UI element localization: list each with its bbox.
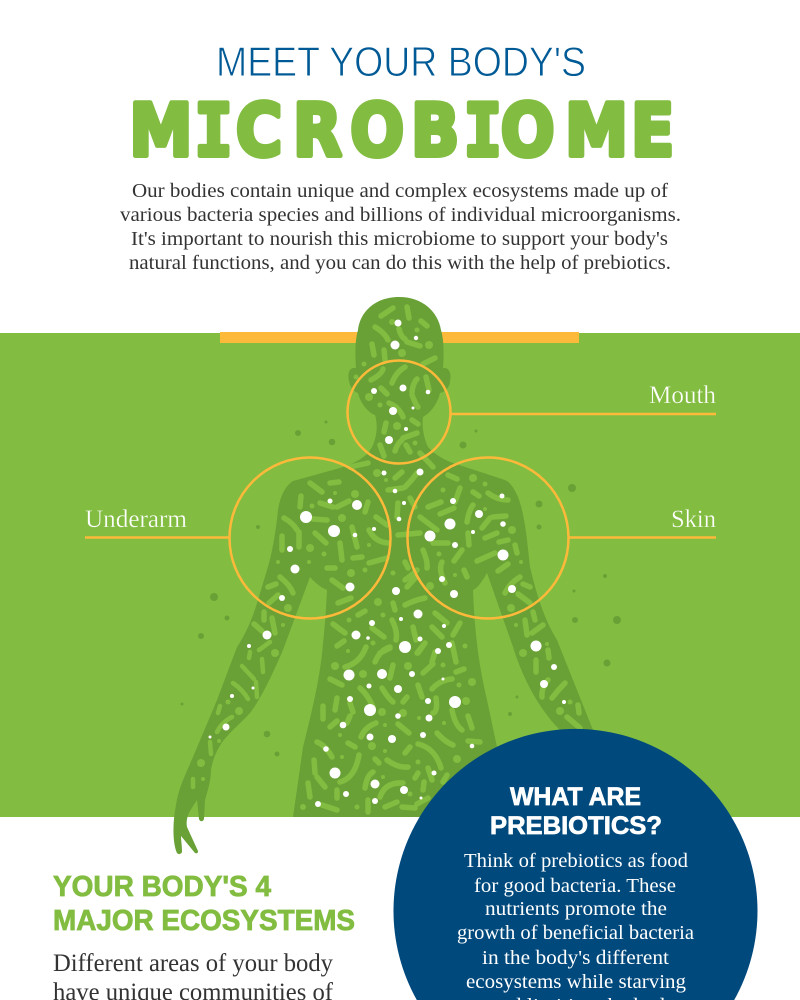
panel: what are prebiotics: Think of prebiotics as food (464, 850, 688, 872)
callout: underarm: Underarm (85, 506, 188, 533)
specks around the body (180, 420, 621, 756)
title: microbiome: I (194, 89, 233, 172)
title: microbiome: M (129, 89, 192, 172)
body silhouette (173, 297, 610, 854)
callout: skin: Skin (671, 506, 716, 533)
title: microbiome (129, 89, 674, 172)
intro paragraph: various bacteria species and billions of individual microorganisms. (120, 205, 681, 226)
panel: what are prebiotics (393, 729, 758, 1000)
title: microbiome: B (411, 89, 459, 172)
title: microbiome: M (565, 89, 628, 172)
panel: what are prebiotics: WHAT ARE (510, 783, 641, 811)
ecosystems paragraph: Different areas of your body (53, 950, 333, 977)
title: microbiome: C (236, 89, 282, 172)
intro paragraph (120, 181, 681, 274)
orange bar (220, 332, 579, 343)
intro paragraph: It's important to nourish this microbiome to support your body's (131, 229, 668, 250)
panel: what are prebiotics: PREBIOTICS? (490, 812, 662, 840)
bacteria dots (197, 319, 572, 810)
title: microbiome: O (501, 89, 555, 172)
intro paragraph: Our bodies contain unique and complex ecosystems made up of (132, 181, 669, 202)
thin arm bacteria (193, 642, 270, 787)
title: microbiome: R (293, 89, 342, 172)
panel: what are prebiotics: growth of beneficial bacteria (457, 922, 694, 944)
title line: meet your body's: MEET YOUR BODY'S (216, 38, 586, 85)
panel: what are prebiotics: for good bacteria. These (474, 875, 676, 897)
callout: underarm (85, 458, 390, 618)
panel: what are prebiotics: nutrients promote the (485, 898, 667, 920)
title: microbiome: E (631, 89, 674, 172)
callout: mouth (348, 360, 716, 464)
heading: your body's 4 major ecosystems: YOUR BODY'S 4 (53, 871, 271, 903)
title: microbiome: O (350, 89, 404, 172)
heading: your body's 4 major ecosystems (53, 871, 355, 937)
panel: what are prebiotics: ecosystems while starving (466, 971, 686, 993)
bacteria strokes (254, 307, 580, 812)
intro paragraph: natural functions, and you can do this with the help of prebiotics. (129, 253, 671, 274)
callout: mouth: Mouth (649, 382, 716, 409)
title: microbiome: I (464, 89, 502, 172)
ecosystems paragraph (53, 950, 334, 1000)
callout: skin (408, 458, 716, 618)
panel: what are prebiotics: in the body's different (482, 947, 669, 969)
white microbe dots (208, 320, 566, 807)
heading: your body's 4 major ecosystems: MAJOR ECOSYSTEMS (53, 905, 355, 937)
human body illustration (173, 297, 610, 854)
green band (0, 333, 800, 817)
